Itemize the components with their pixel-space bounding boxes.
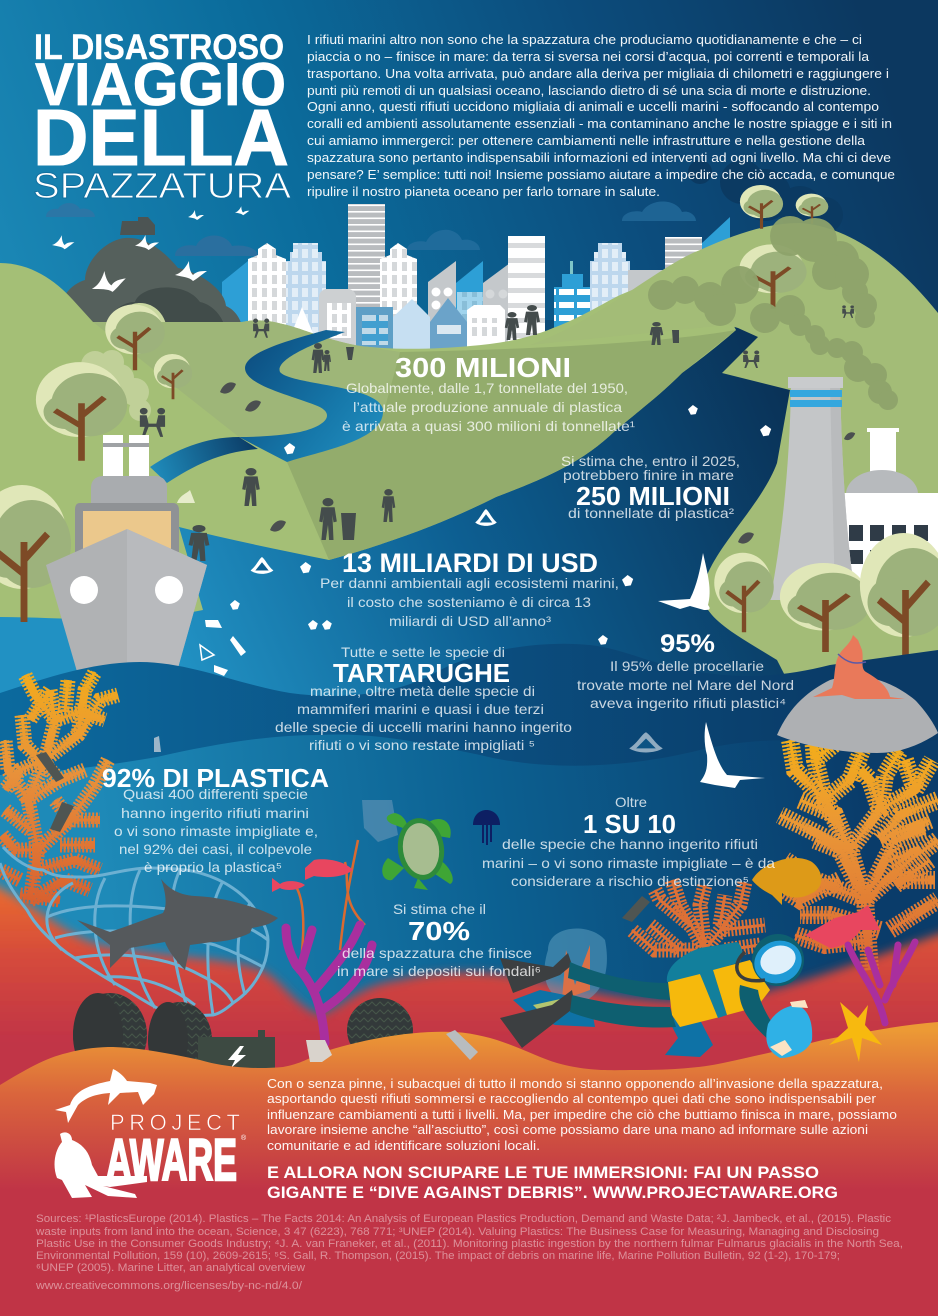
closing text block xyxy=(267,1077,897,1153)
logo wordmark: aware: AWARE xyxy=(106,1128,237,1193)
illustration: top right trees xyxy=(740,185,828,229)
logo: Project Aware xyxy=(55,1069,247,1198)
illustration: right hill xyxy=(530,223,938,735)
stat: 1 su 10: 1 SU 10 xyxy=(583,809,676,839)
illustration: shark xyxy=(77,879,278,970)
stat: 70%: Si stima che il xyxy=(393,901,486,917)
illustration: winding river xyxy=(239,330,383,462)
illustration: dark litter on land xyxy=(220,382,855,544)
stat: 250 milioni: di tonnellate di plastica² xyxy=(568,505,734,521)
stat: tartarughe: mammiferi marini e quasi i due terzi xyxy=(297,701,544,717)
stat: 13 miliardi di USD: Per danni ambientali agli ecosistemi marini, xyxy=(320,575,619,591)
illustration: seabed xyxy=(0,870,938,1180)
sources: Plastic Use in the Consumer Goods Industry; ⁴J. A. van Franeker, et al., (2011). Monitoring plastic ingestion by the northern fulmar Fulmarus glacialis in the North Sea, xyxy=(36,1238,903,1250)
intro text block: piaccia o no – finisce in mare: da terra si sversa nei corsi d’acqua, poi correnti e temporali la xyxy=(307,50,869,64)
stat: 250 milioni xyxy=(561,453,740,521)
illustration: purple coral right xyxy=(848,942,915,1023)
stat: 250 milioni: Si stima che, entro il 2025, xyxy=(561,453,740,469)
illustration: small bottle xyxy=(154,736,161,752)
icon: hammerhead shark xyxy=(55,1069,157,1123)
title: IL DISASTROSO xyxy=(34,28,284,67)
illustration: central tree on hill xyxy=(739,244,807,309)
illustration: seal on rock xyxy=(777,635,938,753)
closing text block: Con o senza pinne, i subacquei di tutto il mondo si stanno opponendo all’invasione della spazzatura, xyxy=(267,1077,883,1091)
sources: www.creativecommons.org/licenses/by-nc-nd/4.0/ xyxy=(35,1280,303,1292)
stat: 95%: aveva ingerito rifiuti plastici⁴ xyxy=(590,695,786,711)
illustration: tyres xyxy=(73,993,413,1078)
stat: 95%: trovate morte nel Mare del Nord xyxy=(577,677,794,693)
stat: 1 su 10: marini – o vi sono rimaste impigliate – è da xyxy=(482,855,775,871)
call to action heading: E ALLORA NON SCIUPARE LE TUE IMMERSIONI: FAI UN PASSO xyxy=(267,1163,819,1182)
intro text block: ripulire il nostro pianeta oceano per farlo tornare in salute. xyxy=(307,185,660,199)
intro text block: Ogni anno, questi rifiuti uccidono migliaia di animali e uccelli marini - soffocando al contempo xyxy=(307,100,879,114)
illustration: battery xyxy=(198,1030,275,1077)
sources: waste inputs from land into the ocean, Science, 3 47 (6223), 768 771; ³UNEP (2014). Valuing Plastics: The Business Case for Measuring, Managing and Disclosing xyxy=(35,1226,879,1238)
illustration: bag icon lower xyxy=(629,732,663,752)
stat: 70%: 70% xyxy=(408,916,470,946)
stat: 92% di plastica: o vi sono rimaste impigliate e, xyxy=(114,823,318,839)
illustration: factory building xyxy=(840,428,938,585)
stat: tartarughe: marine, oltre metà delle specie di xyxy=(310,683,535,699)
illustration: right trees xyxy=(714,533,938,670)
illustration: smoke xyxy=(648,216,898,410)
illustration: starfish xyxy=(829,1002,882,1062)
stat: 1 su 10 xyxy=(482,794,775,889)
sources: Environmental Pollution, 159 (10), 2609-2615; ⁵S. Gall, R. Thompson, (2015). The impact of debris on marine life, Marine Pollution Bulletin, 92 (1-2), 170-179; xyxy=(36,1250,840,1262)
illustration: ocean wave lower xyxy=(0,735,938,1100)
closing text block: asportando questi rifiuti sommersi e raccogliendo al contempo quei dati che sono indispensabili per xyxy=(267,1092,876,1106)
stat: 95%: Il 95% delle procellarie xyxy=(610,658,764,674)
illustration: left coral xyxy=(0,672,118,900)
stat: 13 miliardi di USD: miliardi di USD all’anno³ xyxy=(389,613,551,629)
intro text block: trasportano. Una volta arrivata, può andare alla deriva per migliaia di chilometri e raggiungere i xyxy=(307,67,889,81)
illustration: ocean wave upper xyxy=(0,644,938,1100)
closing text block: lavorare insieme anche “all’asciutto”, così come possiamo dare una mano ad informare sulle azioni xyxy=(267,1123,868,1137)
illustration: river band xyxy=(150,437,258,483)
illustration: ship xyxy=(46,435,207,675)
stat: 92% di plastica: 92% DI PLASTICA xyxy=(102,763,329,793)
stat: 300 milioni: Globalmente, dalle 1,7 tonnellate del 1950, xyxy=(346,380,628,396)
sources: ⁶UNEP (2005). Marine Litter, an analytical overview xyxy=(36,1262,305,1274)
sources: Sources: ¹PlasticsEurope (2014). Plastics – The Facts 2014: An Analysis of European Plastics Production, Demand and Waste Data; ²J. Jambeck, et al., (2015). Plastic xyxy=(36,1213,892,1225)
illustration: middle coral orange xyxy=(632,880,765,1000)
stat: 1 su 10: Oltre xyxy=(615,794,647,810)
stat: tartarughe: TARTARUGHE xyxy=(333,658,510,688)
illustration: can and bottle litter xyxy=(306,1030,478,1062)
intro text block: coralli ed ambienti assolutamente essenziali - ma contaminano anche le nostre spiagge e i siti in xyxy=(307,117,892,131)
stat: 13 miliardi di USD: 13 MILIARDI DI USD xyxy=(342,548,598,578)
intro text block xyxy=(307,33,895,199)
call to action heading xyxy=(267,1163,838,1202)
call to action heading: GIGANTE E “DIVE AGAINST DEBRIS”. WWW.PROJECTAWARE.ORG xyxy=(267,1183,838,1202)
stat: tartarughe: delle specie di uccelli marini hanno ingerito xyxy=(275,719,572,735)
stat: 1 su 10: considerare a rischio di estinzione⁵ xyxy=(511,873,749,889)
illustration: gull right xyxy=(700,722,765,788)
stat: 92% di plastica xyxy=(102,763,329,875)
illustration: right coral xyxy=(780,722,938,970)
clouds xyxy=(46,202,696,256)
stat: 95%: 95% xyxy=(660,630,715,658)
logo wordmark: project: PROJECT xyxy=(110,1110,240,1135)
stat: 70%: della spazzatura che finisce xyxy=(342,945,532,961)
illustration: purple coral left xyxy=(286,925,372,1043)
stat: tartarughe xyxy=(275,644,572,753)
intro text block: cui amiamo immergerci: per ottenere cambiamenti nelle infrastrutture e nella gestione della xyxy=(307,134,865,148)
illustration: pale sea sponge xyxy=(533,998,570,1017)
sources xyxy=(35,1213,903,1292)
stat: 70% xyxy=(337,901,541,979)
stat: 95% xyxy=(577,630,794,711)
illustration: people xyxy=(140,305,854,561)
illustration: left fold shade xyxy=(93,320,400,462)
stat: tartarughe: rifiuti o vi sono restate impigliati ⁵ xyxy=(309,737,535,753)
title: SPAZZATURA xyxy=(33,165,291,206)
title: DELLA xyxy=(33,93,289,182)
stat: 70%: in mare si depositi sui fondali⁶ xyxy=(337,963,541,979)
illustration: ship smoke xyxy=(81,350,151,421)
stat: 300 milioni: 300 MILIONI xyxy=(395,352,571,383)
intro text block: spazzatura sono pertanto indispensabili informazioni ed interventi ad ogni livello. Ma chi ci deve xyxy=(307,151,891,165)
illustration: fish xyxy=(272,858,880,948)
icon: diver silhouette xyxy=(55,1132,147,1198)
illustration: blue coral patches xyxy=(513,990,713,1057)
stat: tartarughe: Tutte e sette le specie di xyxy=(341,644,505,660)
background: sky xyxy=(0,0,938,420)
illustration: plastic bag with coral xyxy=(545,929,607,1004)
illustration: white litter in water xyxy=(177,405,771,676)
illustration: main land xyxy=(0,262,736,619)
intro text block: pensare? E’ semplice: tutti noi! Insieme possiamo aiutare a impedire che ciò accada, e comunque xyxy=(307,168,895,182)
stat: 300 milioni xyxy=(342,352,635,434)
title: VIAGGIO xyxy=(35,51,286,118)
stat: 92% di plastica: nel 92% dei casi, il colpevole xyxy=(119,841,312,857)
illustration: diver xyxy=(500,934,812,1058)
stat: 13 miliardi di USD: il costo che sosteniamo è di circa 13 xyxy=(347,594,591,610)
stat: 250 milioni: potrebbero finire in mare xyxy=(563,467,734,483)
illustration: jellyfish xyxy=(473,810,500,845)
illustration: rubbish mountain with truck and gulls xyxy=(52,206,249,345)
illustration: dark smoke behind hill xyxy=(688,160,843,233)
illustration: cooling tower xyxy=(770,377,856,600)
closing text block: comunitarie e ad identificare soluzioni locali. xyxy=(267,1139,540,1153)
title xyxy=(33,28,291,206)
illustration: plastic bag drifting xyxy=(362,800,398,842)
stat: 92% di plastica: è proprio la plastica⁵ xyxy=(144,859,282,875)
illustration: city skyline xyxy=(222,204,730,360)
logo registered mark: ® xyxy=(241,1134,247,1142)
intro text block: I rifiuti marini altro non sono che la spazzatura che produciamo quotidianamente e che – ci xyxy=(307,33,862,47)
stat: 92% di plastica: Quasi 400 differenti specie xyxy=(123,786,308,802)
illustration: sea plants xyxy=(295,840,365,970)
illustration: land fold shade xyxy=(287,330,736,560)
stat: 250 milioni: 250 MILIONI xyxy=(576,481,730,511)
illustration: gull centre xyxy=(658,553,710,610)
background: sea xyxy=(0,320,938,1120)
illustration: dark bottles in water xyxy=(36,752,650,922)
stat: 300 milioni: l’attuale produzione annuale di plastica xyxy=(353,399,622,415)
stat: 13 miliardi di USD xyxy=(320,548,619,629)
stat: 300 milioni: è arrivata a quasi 300 milioni di tonnellate¹ xyxy=(342,418,635,434)
illustration: sand dunes xyxy=(0,1022,938,1316)
stat: 1 su 10: delle specie che hanno ingerito rifiuti xyxy=(502,836,758,852)
illustration: turtle xyxy=(382,813,453,890)
intro text block: punti più remoti di un qualsiasi oceano, lasciando dietro di sé una scia di morte e distruzione. xyxy=(307,84,871,98)
closing text block: influenzare cambiamenti a tutti i livelli. Ma, per impedire che ciò che buttiamo finisca in mare, possiamo xyxy=(267,1108,897,1122)
illustration: fishing net xyxy=(0,847,268,1016)
illustration: left trees xyxy=(0,304,192,622)
stat: 92% di plastica: hanno ingerito rifiuti marini xyxy=(121,805,309,821)
